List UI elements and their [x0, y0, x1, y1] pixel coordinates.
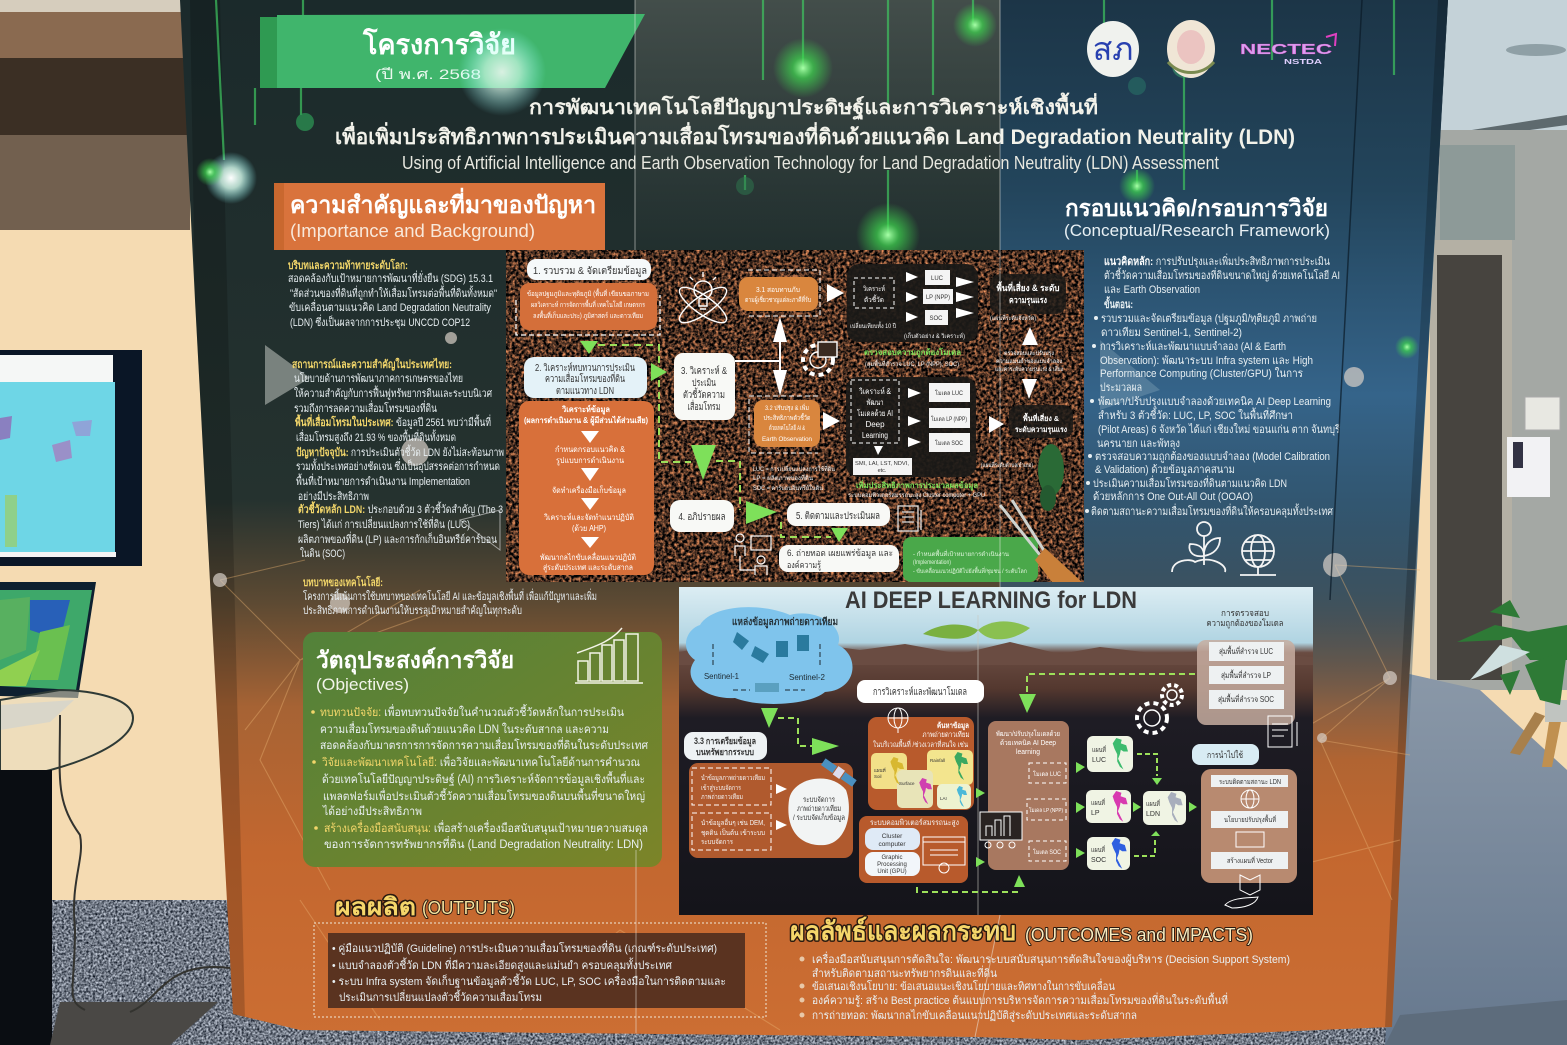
step 2 details: พัฒนากลไกขับเคลื่อนแนวปฏิบัติ — [540, 551, 636, 562]
step 3: analyse and assess — [674, 353, 735, 420]
text block: background: บทบาทของเทคโนโลยี: — [303, 575, 383, 589]
panel: objectives: วัตถุประสงค์การวิจัย — [316, 647, 514, 675]
arrows: inputs to model — [917, 674, 1195, 892]
heading: conceptual framework: (Conceptual/Research Framework) — [1064, 221, 1330, 240]
step 3: analyse and assess: ประเมิน — [692, 378, 716, 389]
panel: objectives: แพลตฟอร์มเพื่อประเมินตัวชี้วัดความเสื่อมโทรมของดินบนพื้นที่ขนาดใหญ่ — [323, 788, 645, 803]
panel: objectives: ด้วยเทคโนโลยีปัญญาประดิษฐ์ (AI) การวิเคราะห์จัดการข้อมูลเชิงพื้นที่และ — [322, 771, 645, 786]
column: severity levels: ความรุนแรง — [1009, 295, 1047, 306]
header banner: research project: โครงการวิจัย — [362, 27, 516, 60]
text block: background: นโยบายด้านการพัฒนาภาคการเกษตรของไทย — [294, 371, 463, 385]
text block: background — [288, 258, 597, 617]
panel: outputs list: ประเมินการเปลี่ยนแปลงตัวชี้วัดความเสื่อมโทรม — [339, 989, 542, 1004]
text block: outcomes list: สำหรับติดตามสถานะทรัพยากรดินและที่ดิน — [812, 965, 997, 980]
column: severity levels — [981, 274, 1073, 469]
box: indicator analysis: LUC — [931, 276, 944, 282]
text block: framework steps: ตรวจสอบความถูกต้องของแบบจำลอง (Model Calibration — [1095, 451, 1330, 463]
heading: outputs: (OUTPUTS) — [422, 898, 515, 918]
text block: background: พื้นที่เป้าหมายการดำเนินงาน Implementation — [296, 473, 470, 488]
text block: background: ในดิน (SOC) — [300, 547, 345, 560]
panel: outputs list: • แบบจำลองตัวชี้วัด LDN ที่มีความละเอียดสูงและแม่นยำ ครอบคลุมทั้งประเทศ — [332, 957, 672, 972]
heading: outcomes and impacts — [790, 916, 1253, 946]
caption: processing: เพิ่มประสิทธิภาพการประมวลผลข้อมูล — [856, 479, 978, 491]
step 3.2: Earth Observation — [762, 436, 812, 443]
panel: outputs list: • ระบบ Infra system จัดเก็บฐานข้อมูลตัวชี้วัด LUC, LP, SOC เครื่องมือในการติดตามและ — [332, 973, 726, 988]
column: severity levels: (แผนที่ระดับตำบล/อำเภอ) — [981, 461, 1033, 469]
panel: objectives: ของการจัดการทรัพยากรที่ดิน (Land Degradation Neutrality: LDN) — [324, 836, 643, 851]
box: satellite data management: / ระบบจัดเก็บข้อมูล — [793, 812, 845, 822]
box: AI model development: SMI, LAI, LST, NDVI, — [855, 461, 909, 467]
box: model validation: สุ่มพื้นที่สำรวจ LUC — [1219, 645, 1273, 656]
caption: processing: ระบบคอมพิวเตอร์สมรรถนะสูง Cluster computer + GPU — [848, 491, 985, 499]
box: model validation: การตรวจสอบ — [1221, 608, 1269, 618]
step 3: analyse and assess: ตัวชี้วัดความ — [683, 387, 725, 401]
text block: background: ปัญหาปัจจุบัน: การประเมินตัวชี้วัด LDN ยังไม่สะท้อนภาพ — [296, 444, 504, 460]
heading: outputs: ผลผลิต — [335, 894, 416, 921]
box: indicator analysis: (เก็บตัวอย่าง & วิเคราะห์) — [904, 331, 965, 340]
panel: AI deep learning for LDN — [679, 587, 1313, 915]
box: model validation: ความถูกต้องของโมเดล — [1206, 618, 1284, 629]
box: satellite data management: ภาพถ่ายดาวเทียม — [701, 793, 743, 801]
box: data search and input maps: แผนที่ — [874, 767, 886, 773]
output maps: LUC LP SOC LDN: แผนที่ — [1091, 845, 1105, 854]
heading: importance and background: ความสำคัญและที่มาของปัญหา — [290, 187, 596, 219]
output maps: LUC LP SOC LDN: SOC — [1091, 857, 1106, 864]
text block: framework steps: ตัวชี้วัดความเสื่อมโทรมของที่ดินขนาดใหญ่ ด้วยเทคโนโลยี AI — [1104, 267, 1340, 282]
text block: background: "สัดส่วนของที่ดินที่ถูกทำให้เสื่อมโทรมต่อพื้นที่ดินทั้งหมด" — [290, 285, 497, 300]
text block: outcomes list — [800, 951, 1290, 1022]
label: analysis and model development: การวิเคราะห์และพัฒนาโมเดล — [873, 685, 967, 698]
text block: background: (LDN) ซึ่งเป็นผลจากการประชุม UNCCD COP12 — [290, 314, 470, 329]
step 3: analyse and assess: เสื่อมโทรม — [688, 399, 720, 413]
box: AI model development: Deep — [865, 420, 885, 429]
label: 3.3 data preparation — [684, 732, 767, 760]
box: indicator analysis: SOC — [929, 316, 943, 322]
legend: indicators — [753, 465, 835, 492]
heading: outputs — [335, 894, 515, 921]
text block: background: สถานการณ์และความสำคัญในประเทศไทย: — [292, 357, 452, 371]
logos: NECTEC — [1240, 41, 1332, 58]
logos: NSTDA — [1284, 59, 1322, 66]
main title — [335, 92, 1295, 173]
step 3.2: ด้วยเทคโนโลยี AI & — [769, 424, 805, 432]
heading: conceptual framework: กรอบแนวคิด/กรอบการวิจัย — [1065, 195, 1328, 221]
text block: framework steps: Performance Computing (Cluster/GPU) ในการ — [1100, 367, 1303, 380]
step 2: review: ตามแนวทาง LDN — [556, 386, 614, 397]
text block: framework steps: ติดตามสถานะความเสื่อมโทรมของที่ดินให้ครอบคลุมทั้งประเทศ — [1091, 503, 1333, 518]
step 3.2 — [749, 396, 820, 453]
box: model development — [980, 721, 1069, 870]
step 6: disseminate — [779, 545, 899, 572]
box: model validation: สุ่มพื้นที่สำรวจ SOC — [1218, 693, 1274, 704]
box: indicator analysis: เปลี่ยนเทียบทั้ง 10 ปี — [850, 320, 896, 330]
cloud: satellite data sources — [686, 607, 853, 704]
label: 3.3 data preparation: 3.3 การเตรียมข้อมูล — [694, 736, 756, 747]
legend: indicators: LP = ผลิตภาพของที่ดิน — [753, 474, 813, 482]
text block: framework steps: & Validation) ด้วยข้อมูลภาคสนาม — [1095, 464, 1235, 476]
text block: outcomes list: องค์ความรู้: สร้าง Best practice ต้นแบบการบริหารจัดการความเสื่อมโทรมของที่ดินในระดับพื้นที่ — [812, 992, 1228, 1007]
panel: research flow on soil — [506, 250, 1084, 582]
caption: processing — [848, 479, 985, 499]
box: AI model development: วิเคราะห์ & — [859, 386, 892, 396]
panel: objectives: สอดคล้องกับมาตรการการจัดการความเสื่อมโทรมของที่ดินในระดับประเทศ — [320, 737, 649, 752]
output maps: LUC LP SOC LDN: แผนที่ — [1091, 798, 1105, 807]
text block: background: รวมทั้งประเทศอย่างชัดเจน ซึ่งเป็นอุปสรรคต่อการกำหนด — [296, 458, 500, 473]
icon: gears — [1137, 685, 1182, 733]
heading: importance and background — [274, 183, 605, 250]
step 2: review — [524, 357, 647, 398]
text block: framework steps: ดาวเทียม Sentinel-1, Sentinel-2) — [1101, 326, 1242, 339]
step 1: collect and prepare data — [516, 259, 660, 335]
box: AI model development: etc. — [878, 468, 887, 474]
panel: objectives: ได้อย่างมีประสิทธิภาพ — [322, 805, 422, 818]
text block: framework steps: ประเมินความเสื่อมโทรมของที่ดินตามแนวคิด LDN — [1093, 475, 1287, 490]
text block: background: ประสิทธิภาพการดำเนินงานให้บรรลุเป้าหมายสำคัญในทุกระดับ — [303, 604, 522, 617]
box: high performance computing: Processing — [877, 862, 907, 868]
box: high performance computing: Graphic — [881, 855, 903, 861]
label: analysis and model development — [857, 680, 984, 703]
text block: outcomes list: ข้อเสนอเชิงนโยบาย: ข้อเสนอแนะเชิงนโยบายและทิศทางในการขับเคลื่อน — [812, 978, 1115, 993]
step 3.1: ตามผู้เชี่ยวชาญแต่ละภาคีที่รับ — [745, 295, 811, 304]
callout: implementation: - ขับเคลื่อนแนวปฏิบัติไปยังพื้นที่/ชุมชน / ระดับโลก — [913, 565, 1027, 575]
column: severity levels: และค่าระดับความรุนแรง & เสี่ยง — [995, 365, 1063, 373]
box: data search and input maps: LAI — [940, 796, 947, 801]
cloud: satellite data sources: แหล่งข้อมูลภาพถ่ายดาวเทียม — [732, 616, 838, 629]
step 1: collect and prepare data: ผลวิเคราะห์ การจัดการพื้นที่ เทคโนโลยี เกษตรกร — [531, 298, 645, 309]
box: data search and input maps: ภาพถ่ายดาวเทียม — [922, 730, 970, 739]
header banner: research project: (ปี พ.ศ. 2568 — [375, 66, 481, 82]
step 3.1: 3.1 สอบทานกับ — [756, 286, 800, 294]
arrows: step 3 branches — [735, 317, 787, 396]
text block: framework steps: สำหรับ 3 ตัวชี้วัด: LUC, LP, SOC ในพื้นที่ศึกษา — [1098, 407, 1293, 422]
step 3.2: ประสิทธิภาพตัวชี้วัด — [764, 413, 810, 422]
step 3.1 — [739, 270, 820, 316]
icon: document — [898, 506, 921, 531]
output maps: LUC LP SOC LDN — [1076, 736, 1197, 870]
step 5: monitor — [787, 503, 890, 526]
step 6: disseminate: 6. ถ่ายทอด เผยแพร่ข้อมูล และ — [787, 548, 893, 559]
box: AI model development — [846, 377, 976, 477]
box: indicator analysis: วิเคราะห์ — [863, 285, 885, 293]
text block: framework steps: การวิเคราะห์และพัฒนาแบบจำลอง (AI & Earth — [1100, 340, 1286, 353]
arrow: cloud to data preparation — [761, 708, 839, 755]
text block: framework steps: Observation): พัฒนาระบบ Infra system และ High — [1100, 355, 1313, 367]
arrow: step 1 to 2 — [580, 341, 691, 462]
box: model development: โมเดล LUC — [1033, 770, 1062, 778]
step 1: collect and prepare data: ข้อมูลปฐมภูมิและทุติยภูมิ (พื้นที่ เขียนขอภาษาม — [527, 287, 649, 298]
box: satellite data management: ระบบจัดการ — [803, 795, 835, 804]
text block: background: ให้ความสำคัญกับการฟื้นฟูทรัพยากรดินและระบบนิเวศ — [294, 385, 492, 400]
caption: model validation: ตรวจสอบความถูกต้องโมเดล — [864, 347, 961, 358]
icon: seedling and globe — [1172, 522, 1276, 575]
box: high performance computing: Unit (GPU) — [877, 869, 907, 875]
box: applications: การนำไปใช้ — [1207, 750, 1243, 760]
label: 3.3 data preparation: บนทรัพยากรระบบ — [696, 747, 754, 757]
box: AI model development: โมเดล LP (NPP) — [931, 415, 967, 423]
box: indicator analysis: ตัวชี้วัด — [864, 293, 884, 304]
output maps: LUC LP SOC LDN: แผนที่ — [1092, 745, 1106, 754]
text block: background: ขับเคลื่อนตามแนวคิด Land Degradation Neutrality — [289, 299, 491, 314]
box: indicator analysis — [847, 264, 978, 342]
box: high performance computing: Cluster — [882, 833, 903, 840]
step 2 details: วิเคราะห์และจัดทำแนวปฏิบัติ — [544, 512, 634, 522]
column: severity levels: พื้นที่เสี่ยง & ระดับ — [996, 281, 1060, 293]
step 3: analyse and assess: 3. วิเคราะห์ & — [681, 365, 727, 377]
header banner: research project — [260, 14, 645, 116]
box: indicator analysis: LP (NPP) — [926, 295, 950, 301]
icon: gear and screen — [803, 342, 837, 375]
box: satellite data management: นำข้อมูลอื่นๆ เช่น DEM, — [701, 818, 765, 827]
heading: conceptual framework — [1064, 195, 1330, 240]
panel: objectives — [303, 628, 662, 867]
output maps: LUC LP SOC LDN: แผนที่ — [1146, 799, 1160, 808]
laptop on glass table — [0, 582, 230, 1045]
illustration: seedling — [923, 615, 1030, 915]
column: severity levels: ระดับความรุนแรง — [1015, 425, 1067, 434]
text block: background: Tiers) ได้แก่ การเปลี่ยนแปลงการใช้ที่ดิน (LUC) — [298, 516, 470, 531]
column: severity levels: (แผนที่ระดับจังหวัด) — [990, 314, 1036, 322]
box: AI model development: โมเดล SOC — [935, 439, 964, 447]
heading: importance and background: (Importance and Background) — [290, 221, 535, 241]
text block: background: ตัวชี้วัดหลัก LDN: ประกอบด้วย 3 ตัวชี้วัดสำคัญ (The 3 — [298, 501, 503, 516]
caption: model validation — [864, 347, 961, 368]
step 4: discussion — [670, 500, 734, 532]
box: data search and input maps — [868, 708, 974, 810]
step 2: review: 2. วิเคราะห์ทบทวนการประเมิน — [535, 362, 635, 374]
icon: people talking — [735, 534, 771, 575]
text block: framework steps — [1085, 253, 1340, 518]
box: satellite data management — [689, 758, 857, 858]
step 2 details: (ด้วย AHP) — [572, 524, 606, 533]
main title: Using of Artificial Intelligence and Earth Observation Technology for Land Degradation Neutrality (LDN) Assessment — [402, 153, 1219, 173]
main title: เพื่อเพิ่มประสิทธิภาพการประเมินความเสื่อมโทรมของที่ดินด้วยแนวคิด Land Degradation Neutrality (LDN) — [335, 121, 1295, 149]
box: satellite data management: นำข้อมูลภาพถ่ายดาวเทียม — [701, 774, 765, 782]
decoration: glowing green threads — [196, 0, 1419, 359]
box: data search and input maps: Surface — [899, 781, 915, 786]
step 2: review: ความเสื่อมโทรมของที่ดิน — [545, 371, 625, 385]
step 4: discussion: 4. อภิปรายผล — [678, 512, 726, 523]
column: severity levels: ความแม่นยำของแบบจำลอง — [996, 358, 1062, 365]
output maps: LUC LP SOC LDN: LP — [1091, 810, 1100, 817]
text block: framework steps: และ Earth Observation — [1104, 284, 1200, 296]
text block: background: รวมถึงการลดความเสื่อมโทรมของที่ดิน — [294, 400, 437, 415]
icon: idea atom — [675, 272, 731, 328]
step 2 details: กำหนดกรอบแนวคิด & — [555, 445, 626, 454]
box: applications: นโยบายปรับปรุงพื้นที่ — [1224, 813, 1276, 824]
box: model validation: สุ่มพื้นที่สำรวจ LP — [1221, 669, 1271, 680]
box: AI model development: โมเดลด้วย AI — [857, 408, 893, 418]
box: AI model development: Learning — [862, 431, 888, 440]
box: satellite data management: ระบบจัดการ — [701, 838, 733, 846]
text block: background: บริบทและความท้าทายระดับโลก: — [288, 258, 408, 272]
panel: objectives: วิจัยและพัฒนาเทคโนโลยี: เพื่อวิจัยและพัฒนาเทคโนโลยีด้านการคำนวณ — [322, 754, 640, 769]
text block: framework steps: รวบรวมและจัดเตรียมข้อมูล (ปฐมภูมิ/ทุติยภูมิ ภาพถ่าย — [1101, 312, 1317, 325]
potted plant — [1457, 600, 1567, 767]
column: severity levels: ตรวจสอบและปรับปรุง — [1004, 350, 1054, 357]
text block: background: โครงการนี้เน้นการใช้บทบาทของเทคโนโลยี AI และข้อมูลเชิงพื้นที่ เพื่อแก้ปัญหาและเพิ่ม — [303, 588, 597, 603]
icon: growth chart — [575, 628, 643, 683]
box: satellite data management: ชุดดิน เป็นต้น เข้าระบบ — [701, 828, 765, 837]
text block: background: เสื่อมโทรมสูงถึง 21.93 % ของพื้นที่ดินทั้งหมด — [296, 429, 456, 444]
box: applications — [1192, 744, 1297, 908]
box: data search and input maps: ในบริเวณพื้นที่ /ช่วงเวลาที่สนใจ เช่น — [873, 739, 968, 749]
output maps: LUC LP SOC LDN: LDN — [1146, 811, 1160, 818]
step 2 details: รูปแบบการดำเนินงาน — [556, 456, 624, 466]
panel: objectives: (Objectives) — [316, 675, 409, 694]
logos: สภ — [1093, 31, 1133, 67]
text block: background: อย่างมีประสิทธิภาพ — [298, 490, 369, 503]
box: satellite data management: ภาพถ่ายดาวเทียม — [797, 804, 841, 813]
legend: indicators: LUC = การเปลี่ยนแปลงการใช้ที่ดิน — [753, 465, 835, 473]
box: high performance computing: computer — [878, 841, 906, 848]
box: model development: โมเดล SOC — [1033, 848, 1062, 856]
step 2 details: วิเคราะห์ข้อมูล — [562, 404, 610, 415]
callout: implementation: (Implementation) — [913, 560, 951, 566]
cloud: satellite data sources: Sentinel-1 — [704, 671, 739, 681]
box: applications: สร้างแผนที่ Vector — [1227, 856, 1274, 865]
text block: framework steps: ประมวลผล — [1100, 382, 1142, 394]
panel: objectives: ทบทวนปัจจัย: เพื่อทบทวนปัจจัยในคำนวณตัวชี้วัดหลักในการประเมิน — [320, 704, 624, 719]
box: model development: โมเดล LP (NPP) — [1029, 806, 1063, 814]
text block: framework steps: (Pilot Areas) 6 จังหวัด ได้แก่ เชียงใหม่ ขอนแก่น ตาก จันทบุรี — [1098, 423, 1340, 436]
text block: framework steps: ด้วยหลักการ One Out-All Out (OOAO) — [1093, 491, 1253, 503]
decoration: network lines and nodes — [213, 332, 1420, 1030]
text block: framework steps: แนวคิดหลัก: การปรับปรุงและเพิ่มประสิทธิภาพการประเมิน — [1104, 253, 1330, 268]
box: AI model development: โมเดล LUC — [935, 389, 964, 397]
callout: implementation: - กำหนดพื้นที่เป้าหมายการดำเนินงาน — [913, 548, 1009, 558]
box: data search and input maps: Rainfall — [930, 758, 945, 763]
illustration: plant and garden tools — [1000, 444, 1082, 582]
step 6: disseminate: องค์ความรู้ — [787, 559, 821, 571]
monitor — [0, 350, 142, 566]
panel: objectives: สร้างเครื่องมือสนับสนุน: เพื่อสร้างเครื่องมือสนับสนุนเป้าหมายความสมดุล — [324, 820, 648, 835]
step 2 details: สู่ระดับประเทศ และระดับสากล — [543, 563, 633, 573]
text block: framework steps: ขั้นตอน: — [1104, 296, 1133, 311]
heading: outcomes and impacts: ผลลัพธ์และผลกระทบ — [790, 916, 1016, 946]
heading: outcomes and impacts: (OUTCOMES and IMPACTS) — [1025, 925, 1253, 945]
box: data search and input maps: ค้นหาข้อมูล — [937, 721, 969, 731]
box: data search and input maps: Soil — [874, 774, 882, 779]
text block: background: พื้นที่เสื่อมโทรมในประเทศ: ข้อมูลปี 2561 พบว่ามีพื้นที่ — [295, 414, 491, 429]
caption: model validation: (สุ่มพื้นที่สำรวจ LUC, LP (NPP), SOC) — [865, 358, 959, 368]
text block: background: ผลิตภาพของที่ดิน (LP) และการกักเก็บอินทรีย์คาร์บอน — [298, 531, 497, 546]
box: model development: ด้วยเทคนิค AI Deep — [1000, 739, 1056, 747]
panel: outputs list: • คู่มือแนวปฏิบัติ (Guideline) การประเมินความเสื่อมโทรมของที่ดิน (เกณฑ์ระดับประเทศ) — [332, 940, 717, 955]
main title: การพัฒนาเทคโนโลยีปัญญาประดิษฐ์และการวิเคราะห์เชิงพื้นที่ — [529, 92, 1098, 121]
step 2 details — [519, 401, 654, 575]
arrow: 3.1 right — [827, 284, 844, 302]
step 2 details: (ผลการดำเนินงาน & ผู้มีส่วนได้ส่วนเสีย) — [524, 415, 648, 426]
column: severity levels: พื้นที่เสี่ยง & — [1023, 412, 1060, 423]
box: high performance computing: ระบบคอมพิวเตอร์สมรรถนะสูง — [870, 818, 959, 827]
text block: outcomes list: การถ่ายทอด: พัฒนากลไกขับเคลื่อนแนวปฏิบัติสู่ระดับประเทศและระดับสากล — [812, 1007, 1137, 1022]
cloud: satellite data sources: Sentinel-2 — [789, 672, 825, 682]
arrow: 4 to 5 — [746, 501, 777, 524]
box: high performance computing — [859, 816, 968, 883]
panel: objectives: ความเสื่อมโทรมของดินด้วยแนวคิด LDN ในระดับสากล และความ — [320, 721, 609, 736]
output maps: LUC LP SOC LDN: LUC — [1092, 757, 1106, 764]
panel: AI deep learning for LDN: AI DEEP LEARNING for LDN — [845, 587, 1137, 614]
text block: background: สอดคล้องกับเป้าหมายการพัฒนาที่ยั่งยืน (SDG) 15.3.1 — [288, 270, 493, 285]
logos — [1087, 20, 1336, 78]
box: applications: ระบบติดตามสถานะ LDN — [1219, 778, 1281, 786]
legend: indicators: SOC = คาร์บอนอินทรีย์ในดิน — [753, 484, 823, 492]
arrow: 3.2 right — [823, 412, 840, 430]
box: satellite data management: เข้าสู่ระบบจัดการ — [701, 784, 741, 792]
arrow: to discussion — [691, 445, 740, 510]
panel: outputs list — [314, 923, 766, 1017]
box: model validation — [1197, 608, 1297, 747]
arrow: 5 to 6 — [781, 522, 848, 542]
arrow: step 2 to 3 — [651, 363, 667, 381]
text block: framework steps: พัฒนา/ปรับปรุงแบบจำลองด้วยเทคนิค AI Deep Learning — [1098, 396, 1331, 408]
box: AI model development: พัฒนา — [866, 398, 884, 407]
text block: framework steps: นครนายก และพัทลุง — [1097, 438, 1180, 450]
step 3.2: 3.2 ปรับปรุง & เพิ่ม — [765, 403, 809, 412]
text block: outcomes list: เครื่องมือสนับสนุนการตัดสินใจ: พัฒนาระบบสนับสนุนการตัดสินใจของผู้บริหาร (Decision Support System) — [812, 951, 1290, 966]
callout: implementation — [903, 537, 1038, 582]
step 5: monitor: 5. ติดตามและประเมินผล — [796, 511, 880, 522]
step 2 details: จัดทำเครื่องมือเก็บข้อมูล — [552, 484, 626, 496]
seams between board panels — [635, 0, 1000, 1037]
box: model development: learning — [1016, 749, 1040, 756]
step 1: collect and prepare data: ลงพื้นที่เก็บและประ) ภูมิศาสตร์ และดาวเทียม — [533, 309, 643, 320]
step 1: collect and prepare data: 1. รวบรวม & จัดเตรียมข้อมูล — [533, 265, 647, 277]
box: model development: พัฒนา/ปรับปรุงโมเดลด้วย — [996, 729, 1060, 738]
